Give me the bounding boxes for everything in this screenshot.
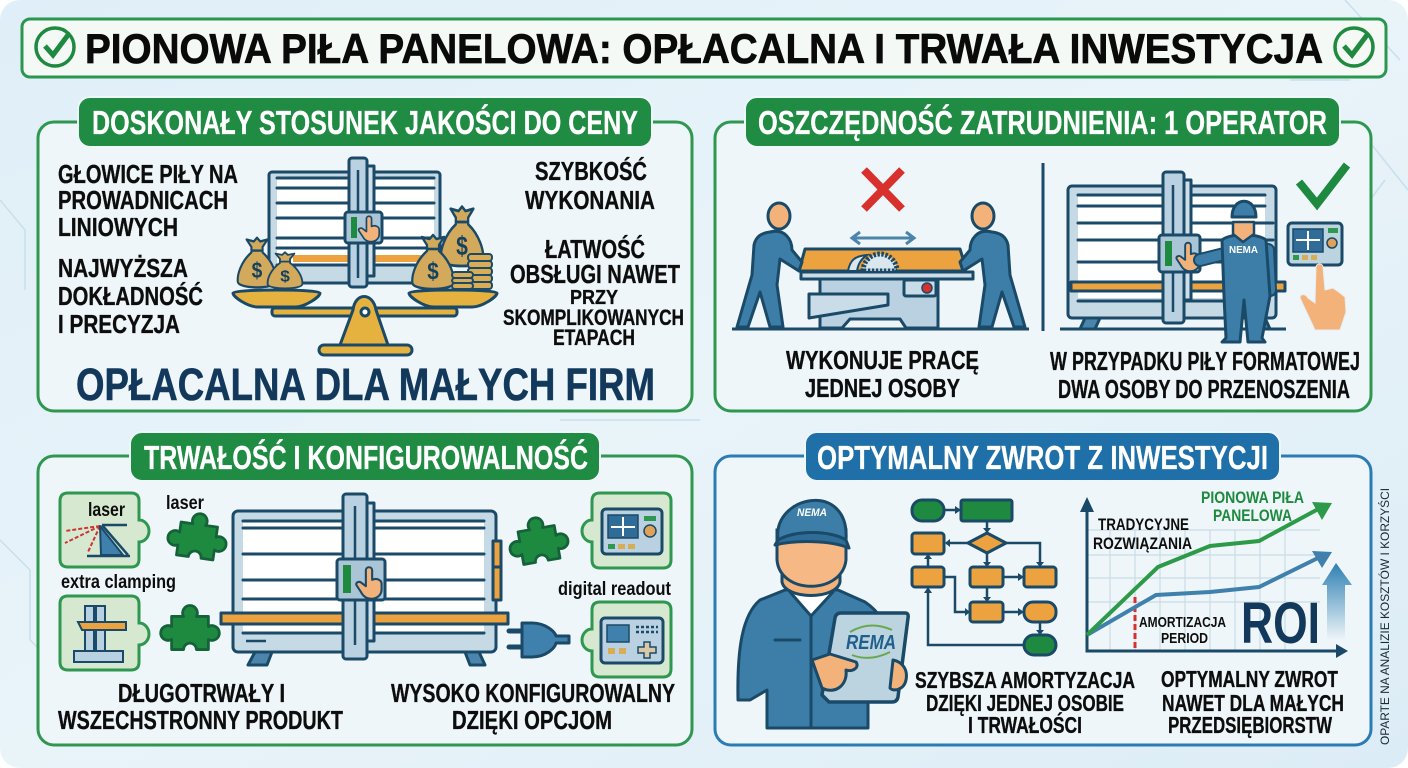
chart: ROI lines: ROZWIĄZANIA	[1093, 534, 1192, 553]
icon: puzzle piece	[505, 513, 571, 566]
chart axes	[1087, 503, 1340, 651]
option: laser	[60, 493, 149, 567]
figure: worker with tablet: NEMA	[797, 507, 827, 519]
caption: faster amortization	[915, 667, 1135, 738]
panel: optimal return on investment	[715, 432, 1371, 745]
arrow: ROI up	[1322, 563, 1352, 640]
illustration: balance scale with money	[233, 207, 497, 355]
option: laser: laser	[88, 500, 126, 521]
label: digital readout: digital readout	[558, 579, 672, 600]
option: extra clamping	[60, 596, 149, 670]
caption: durable product	[58, 678, 343, 735]
icon: plug	[509, 623, 569, 657]
icon: puzzle piece	[166, 510, 230, 561]
caption: optimal return: OPTYMALNY ZWROT	[1161, 666, 1338, 692]
icon: tablet: REMA	[846, 632, 896, 654]
left text block: NAJWYŻSZA	[58, 253, 188, 283]
title: PIONOWA PIŁA PANELOWA: OPŁACALNA I TRWAŁA INWESTYCJA	[85, 25, 1323, 72]
caption: faster amortization: DZIĘKI JEDNEJ OSOBIE	[926, 690, 1124, 716]
caption: configurable	[391, 678, 675, 735]
illustration: machine	[221, 494, 508, 665]
icon: control panel	[1288, 223, 1342, 265]
figure: worker with tablet	[738, 500, 908, 728]
icon: pointing hand	[1300, 264, 1346, 330]
line: panel saw	[1087, 502, 1332, 635]
caption: optimal return	[1161, 666, 1344, 738]
panel: durability and configurability	[38, 432, 692, 745]
caption: durable product: DŁUGOTRWAŁY I	[118, 678, 285, 708]
right text block: SZYBKOŚĆ	[535, 156, 647, 186]
icon: check right	[1335, 28, 1373, 66]
chart: ROI lines: PIONOWA PIŁA	[1201, 488, 1304, 507]
left text block: DOKŁADNOŚĆ	[58, 281, 203, 311]
icon: red cross	[864, 170, 902, 209]
caption: one person: WYKONUJE PRACĘ	[786, 345, 979, 375]
option: digital readout	[582, 602, 671, 677]
left text block: LINIOWYCH	[58, 212, 178, 242]
figure: right worker	[960, 203, 1025, 327]
title banner	[22, 19, 1386, 77]
right text block: OBSŁUGI NAWET	[510, 259, 680, 289]
chart: ROI lines: ROI	[1241, 591, 1320, 656]
illustration: machine	[269, 158, 440, 287]
icon: tablet	[822, 613, 908, 702]
illustration: format saw with two workers	[732, 203, 1029, 329]
chart: ROI lines: PANELOWA	[1213, 506, 1292, 525]
arrow: two-way movement	[852, 232, 914, 244]
caption: faster amortization: SZYBSZA AMORTYZACJA	[915, 667, 1135, 693]
caption: format saw	[1050, 346, 1360, 404]
figure: left worker	[737, 203, 802, 327]
right text block: SKOMPLIKOWANYCH	[503, 305, 684, 330]
caption: configurable: DZIĘKI OPCJOM	[452, 705, 612, 735]
right text block	[503, 156, 684, 350]
panel heading	[78, 97, 652, 147]
figure: operator	[1200, 201, 1270, 342]
caption: configurable: WYSOKO KONFIGUROWALNY	[391, 678, 675, 708]
caption: faster amortization: I TRWAŁOŚCI	[968, 711, 1082, 738]
panel: staffing savings	[715, 97, 1371, 411]
caption: optimal return: PRZEDSIĘBIORSTW	[1168, 712, 1332, 738]
caption: one person	[786, 345, 979, 403]
option: digital display	[582, 493, 671, 568]
left text block: GŁOWICE PIŁY NA	[58, 159, 238, 189]
panel heading	[745, 97, 1340, 147]
right text block: ETAPACH	[553, 325, 635, 350]
right text block: ŁATWOŚĆ	[545, 234, 645, 264]
left text block: PROWADNICACH	[58, 185, 228, 215]
panel heading: OPTYMALNY ZWROT Z INWESTYCJI	[817, 439, 1268, 476]
label: laser: laser	[166, 493, 205, 514]
panel heading: TRWAŁOŚĆ I KONFIGUROWALNOŚĆ	[144, 439, 588, 476]
figure: operator: NEMA	[1229, 245, 1258, 256]
icon: green check	[1299, 165, 1347, 204]
side note: OPARTE NA ANALIZIE KOSZTÓW I KORZYŚCI	[1377, 488, 1392, 745]
illustration: panel saw with one operator	[1060, 165, 1347, 342]
right text block: PRZY	[570, 287, 619, 309]
panel heading	[130, 432, 600, 481]
right text block: WYKONANIA	[525, 185, 655, 215]
caption: one person: JEDNEJ OSOBY	[805, 373, 960, 403]
icon: check left	[36, 28, 74, 66]
left text block: I PRECYZJA	[58, 309, 180, 339]
panel heading	[805, 432, 1280, 481]
icon: puzzle piece	[161, 606, 219, 650]
callout: profitable for small firms: OPŁACALNA DLA MAŁYCH FIRM	[76, 359, 655, 410]
line: traditional	[1087, 551, 1332, 635]
label: extra clamping: extra clamping	[61, 572, 176, 593]
caption: durable product: WSZECHSTRONNY PRODUKT	[58, 705, 343, 735]
divider	[1042, 163, 1044, 331]
flowchart	[912, 500, 1056, 655]
caption: optimal return: NAWET DLA MAŁYCH	[1162, 690, 1344, 716]
left text block	[58, 159, 238, 339]
chart: ROI lines	[1080, 488, 1352, 658]
chart: ROI lines: PERIOD	[1161, 630, 1208, 647]
chart: ROI lines: TRADYCYJNE	[1098, 515, 1189, 534]
chart: ROI lines: AMORTIZACJA	[1139, 614, 1226, 631]
panel heading: DOSKONAŁY STOSUNEK JAKOŚCI DO CENY	[92, 104, 638, 141]
panel: quality to price	[38, 97, 692, 411]
